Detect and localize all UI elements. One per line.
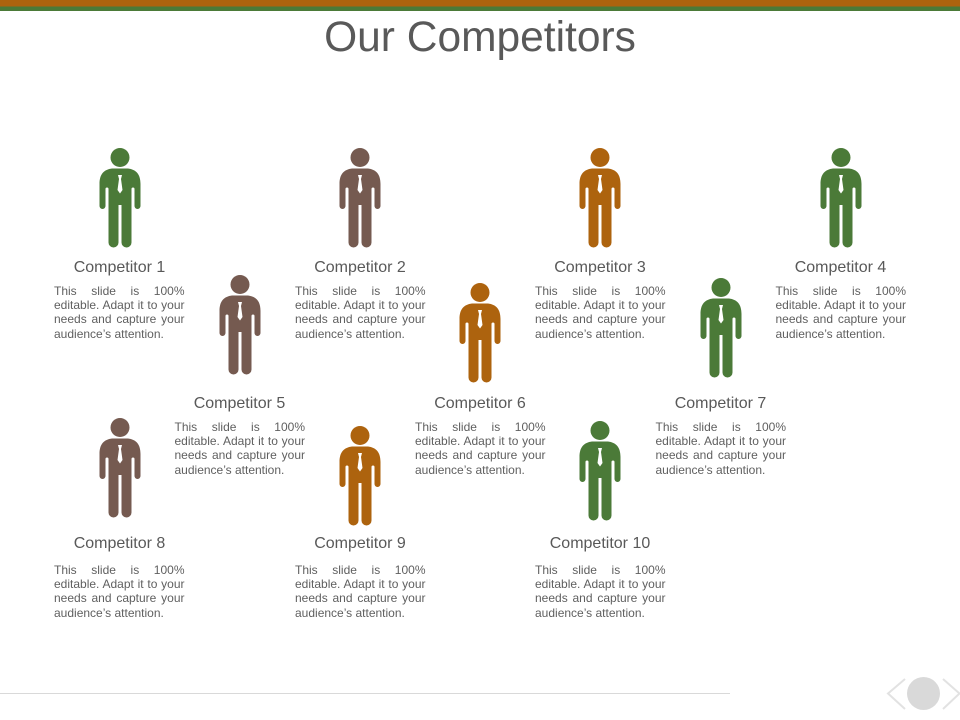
panel: competitor 4 [776, 148, 906, 341]
panel: competitor 2 [295, 148, 426, 341]
panel: competitor 10 [535, 421, 666, 620]
description: This slide is 100% editable. Adapt it to your needs and capture your audience’s attention. [174, 420, 305, 477]
heading: Competitor 8 [74, 534, 165, 552]
heading: Competitor 1 [74, 258, 165, 276]
icon: green person [700, 278, 742, 378]
description: This slide is 100% editable. Adapt it to your needs and capture your audience’s attention. [295, 284, 426, 341]
description: This slide is 100% editable. Adapt it to your needs and capture your audience’s attention. [415, 420, 546, 477]
icon: green person [820, 148, 862, 248]
icon: orange person [460, 283, 500, 382]
panel: competitor 7 [656, 278, 786, 477]
heading: Competitor 6 [434, 394, 526, 412]
heading: Competitor 2 [314, 258, 406, 276]
heading: Competitor 10 [550, 534, 650, 552]
description: This slide is 100% editable. Adapt it to your needs and capture your audience’s attention. [54, 563, 184, 620]
title: Our Competitors [324, 14, 636, 61]
heading: Competitor 9 [314, 534, 406, 552]
top colour band [0, 0, 960, 11]
heading: Competitor 5 [194, 394, 285, 412]
icon: brown person [100, 418, 140, 518]
description: This slide is 100% editable. Adapt it to your needs and capture your audience’s attention. [54, 284, 184, 341]
panel: competitor 8 [54, 418, 184, 620]
description: This slide is 100% editable. Adapt it to your needs and capture your audience’s attention. [295, 563, 426, 620]
icon: green person [100, 148, 140, 248]
description: This slide is 100% editable. Adapt it to your needs and capture your audience’s attention. [535, 284, 666, 341]
panel: competitor 1 [54, 148, 184, 341]
panel: competitor 9 [295, 426, 426, 620]
icon: orange person [580, 148, 620, 248]
icon: orange person [340, 426, 380, 526]
heading: Competitor 3 [554, 258, 646, 276]
heading: Competitor 4 [795, 258, 886, 276]
description: This slide is 100% editable. Adapt it to your needs and capture your audience’s attention. [656, 420, 786, 477]
icon: green person [580, 421, 620, 520]
icon: brown person [220, 275, 260, 374]
panel: competitor 3 [535, 148, 666, 341]
description: This slide is 100% editable. Adapt it to your needs and capture your audience’s attention. [535, 563, 666, 620]
panel: competitor 5 [174, 275, 305, 477]
footer navigation icon [886, 677, 960, 710]
panel: competitor 6 [415, 283, 546, 477]
description: This slide is 100% editable. Adapt it to your needs and capture your audience’s attention. [776, 284, 906, 341]
icon: brown person [340, 148, 380, 248]
heading: Competitor 7 [675, 394, 766, 412]
